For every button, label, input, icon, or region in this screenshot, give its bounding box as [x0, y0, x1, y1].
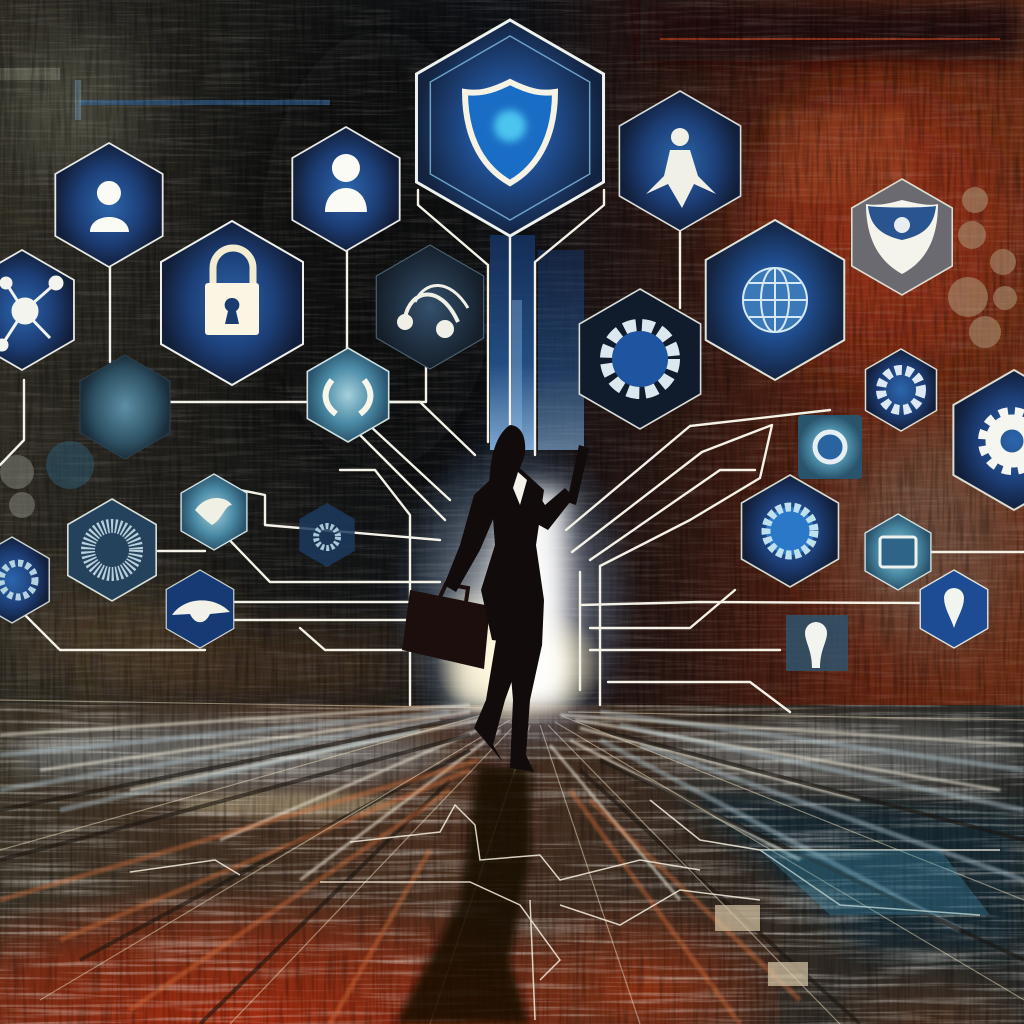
hexagon: teal camera — [865, 514, 931, 590]
icon: padlock — [205, 248, 259, 335]
hexagon: small gear — [865, 349, 937, 431]
icon: figure with open arms — [646, 128, 716, 208]
icon: gear — [1, 563, 35, 597]
right arm and tablet — [528, 478, 574, 530]
hexagon: location pin — [920, 570, 988, 648]
hexagon: person left — [55, 143, 163, 267]
icon: shield — [465, 82, 555, 183]
hexagon: teal bird — [181, 474, 247, 550]
left arm — [444, 478, 497, 592]
icon: pin — [944, 588, 964, 628]
floor circuit traces — [130, 800, 1000, 1020]
silhouette: businesswoman — [444, 425, 589, 772]
hexagon: padlock — [161, 221, 303, 385]
icon: gear — [766, 507, 814, 555]
central beam of light — [390, 235, 640, 770]
hexagon: radial teal — [80, 355, 170, 459]
floor shadow of the figure — [395, 765, 530, 1024]
hexagon: globe — [706, 220, 844, 380]
icon: gear — [881, 370, 921, 410]
body and skirt — [481, 470, 544, 646]
pale hexagon cluster on right — [948, 187, 1017, 348]
background wall — [0, 0, 1024, 730]
icon: curved mark — [195, 498, 232, 525]
hexagon: gear left edge — [0, 537, 49, 623]
hexagon: shield — [416, 20, 604, 236]
icon: globe — [743, 268, 807, 332]
panel: camera tile — [798, 415, 862, 479]
briefcase — [402, 584, 490, 669]
pale hexagon cluster on left — [0, 441, 94, 518]
hexagon: ring — [68, 499, 156, 601]
icon: cap — [172, 600, 230, 622]
hexagon: person centre — [292, 127, 400, 251]
connector lines — [0, 190, 1024, 712]
icon: keyhole — [805, 622, 827, 668]
floor pale tiles — [715, 905, 808, 986]
legs — [474, 640, 526, 762]
icon: network nodes — [0, 277, 62, 350]
floor blue data panel — [760, 850, 990, 915]
panel: keyhole tile — [786, 615, 848, 671]
hexagon: gear right — [953, 370, 1024, 510]
hexagon: network — [0, 250, 74, 370]
hexagon: gear centre — [579, 289, 701, 429]
hexagon: gear blue right — [742, 475, 838, 587]
hexagon: small shield — [852, 179, 952, 295]
hexagon: figure — [619, 91, 741, 231]
icon: gear — [612, 331, 668, 387]
icon: swirl — [815, 432, 845, 462]
hexagon: eye — [307, 348, 389, 442]
hexagon: dim small — [299, 503, 355, 567]
icon: gear — [993, 422, 1024, 460]
icon: camera — [880, 537, 916, 567]
white shirt collar — [513, 472, 527, 505]
icon: shield with pin — [866, 200, 938, 274]
icon: wifi arcs — [399, 285, 468, 336]
hexagon: dark blue cap — [166, 570, 234, 648]
icon: iris ring — [88, 526, 136, 574]
hair and head — [488, 425, 530, 520]
floor — [0, 705, 1024, 1024]
floor light streaks — [0, 700, 1024, 1024]
hexagon: wifi — [376, 245, 484, 369]
icon: dim gear — [316, 526, 338, 548]
icon: eye brackets — [326, 380, 370, 414]
icon: person — [90, 181, 129, 232]
icon: person — [325, 154, 367, 212]
